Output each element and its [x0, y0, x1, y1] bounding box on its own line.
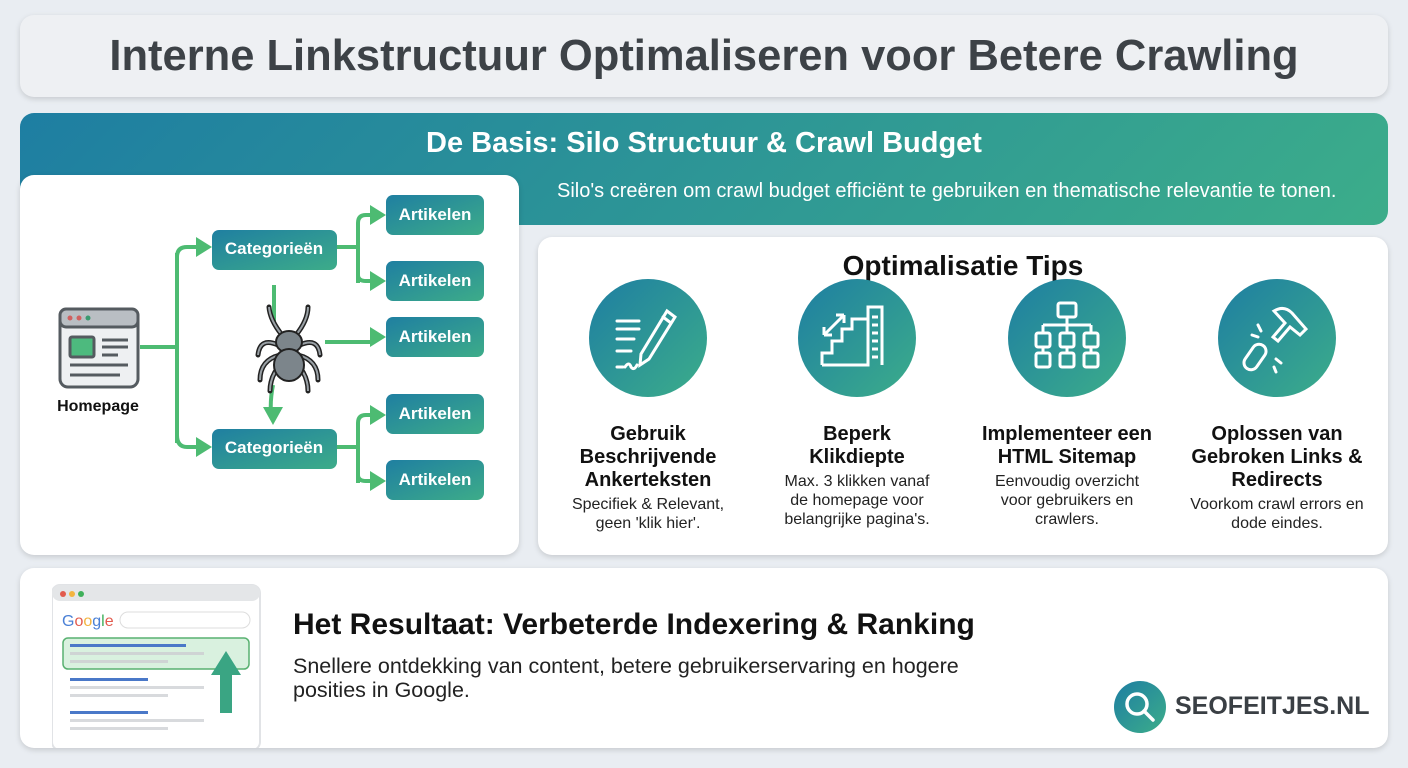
category boxes: Artikelen: [399, 327, 471, 346]
banner: [20, 113, 1388, 225]
banner heading: De Basis: Silo Structuur & Crawl Budget: [426, 127, 982, 159]
tip 1: Gebruik Beschrijvende Ankerteksten: [580, 423, 716, 491]
google illustration: [52, 584, 261, 748]
category boxes: [212, 195, 484, 500]
title: Interne Linkstructuur Optimaliseren voor Betere Crawling: [109, 32, 1299, 80]
icon: stairs: [798, 279, 916, 397]
panel: result: [20, 568, 1388, 748]
tip 4: [1190, 423, 1364, 532]
tip 3: Implementeer een HTML Sitemap: [982, 423, 1152, 468]
banner subtitle: Silo's creëren om crawl budget efficiënt te gebruiken en thematische relevantie te tonen.: [557, 180, 1336, 202]
tip 2: Beperk: [823, 423, 891, 445]
category boxes: Categorieën: [225, 239, 323, 258]
category boxes: Artikelen: [399, 404, 471, 423]
tip 2: Klikdiepte: [809, 446, 905, 468]
homepage icon: [57, 309, 139, 415]
spider: [258, 307, 320, 391]
result text: Snellere ontdekking van content, betere gebruikerservaring en hogere posities in Google.: [293, 654, 959, 702]
category boxes: Artikelen: [399, 205, 471, 224]
tips heading: Optimalisatie Tips: [843, 250, 1083, 281]
icon: sitemap: [1008, 279, 1126, 397]
logo: SEOFEITJES.NL: [1175, 692, 1369, 720]
category boxes: Artikelen: [399, 470, 471, 489]
google illustration: Google: [62, 613, 114, 630]
category boxes: Artikelen: [399, 271, 471, 290]
icon: pencil: [589, 279, 707, 397]
homepage icon: Homepage: [57, 398, 139, 415]
tip 2: de homepage voor: [790, 492, 924, 509]
tip 2: [784, 423, 930, 528]
panel: silo diagram: [20, 175, 519, 555]
title: [20, 15, 1388, 97]
tip 4: Oplossen van Gebroken Links & Redirects: [1191, 423, 1363, 491]
result heading: Het Resultaat: Verbeterde Indexering & Ranking: [293, 608, 975, 641]
category boxes: Categorieën: [225, 438, 323, 457]
tip 1: Specifiek & Relevant, geen 'klik hier'.: [572, 496, 724, 532]
logo: [1114, 681, 1369, 733]
icon: hammer link: [1218, 279, 1336, 397]
tip 4: Voorkom crawl errors en dode eindes.: [1190, 496, 1364, 532]
tip 1: [572, 423, 724, 532]
tip 3: [982, 423, 1152, 528]
tip 2: belangrijke pagina's.: [784, 511, 930, 528]
panel: tips: [538, 237, 1388, 555]
tip 2: Max. 3 klikken vanaf: [785, 473, 929, 490]
tip 3: Eenvoudig overzicht voor gebruikers en crawlers.: [995, 473, 1139, 528]
